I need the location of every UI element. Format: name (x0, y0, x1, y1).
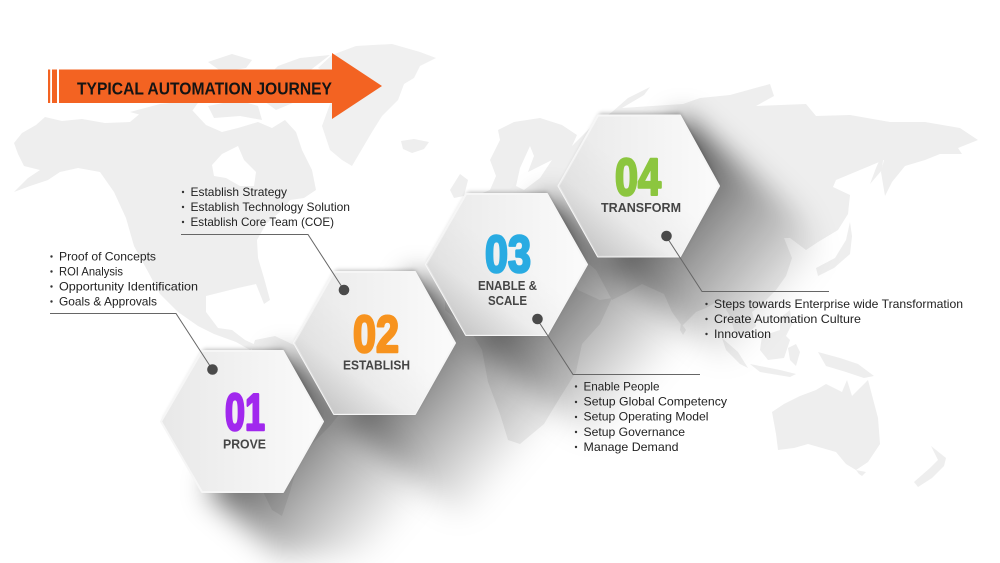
text block: step 03 bullets: Enable People (584, 380, 660, 394)
map: Australia (772, 380, 880, 470)
hexagon 01 top shadow (164, 349, 321, 490)
text block: step 02 bullets: Establish Core Team (COE) (190, 215, 334, 229)
hexagon 03 (426, 194, 587, 335)
map: Hudson Bay cutout (212, 146, 256, 186)
map: South America (240, 336, 352, 516)
text block: step 04 bullets: Create Automation Culture (714, 312, 861, 326)
hexagon 04 top shadow (561, 113, 718, 255)
text block: step 01 bullets (50, 250, 198, 308)
panel: step 03 enable and scale (426, 192, 587, 335)
text block: step 04 bullets: Innovation (714, 327, 771, 341)
text block: step 04 bullets: Steps towards Enterprise wide Transformation (714, 297, 963, 311)
hexagon 02 inner shade (294, 272, 455, 414)
label transform: TRANSFORM (601, 200, 681, 215)
text block: step 04 bullets (705, 297, 963, 341)
callout: step 01 leader line (50, 314, 218, 375)
text block: step 03 bullets (575, 380, 727, 454)
map: Baltic cutout (516, 146, 552, 190)
arrow stripes (48, 70, 57, 103)
hexagon 02 (294, 272, 455, 414)
callout: step 02 leader line (181, 234, 349, 295)
number 04: 04 (615, 149, 661, 207)
shadow: hexagon 02 (340, 272, 575, 514)
text block: step 02 bullets (182, 185, 350, 229)
text block: step 03 bullets: Manage Demand (584, 440, 678, 454)
text block: step 01 bullets: ROI Analysis (59, 264, 123, 278)
map: Greenland (318, 44, 436, 166)
label establish: ESTABLISH (343, 358, 410, 372)
map: North America (14, 108, 316, 350)
callout: step 04 leader line (661, 231, 829, 292)
text block: step 03 bullets: Setup Governance (584, 425, 685, 439)
panel: step 04 transform (558, 113, 719, 256)
hexagon 01 (161, 351, 323, 492)
map: Eurasia (470, 84, 978, 338)
text block: step 01 bullets: Proof of Concepts (59, 250, 156, 264)
map: Tasmania (856, 470, 866, 476)
hexagon long shadows (208, 115, 840, 556)
hexagon 03 top shadow (428, 192, 585, 333)
hexagon 02 top shadow (296, 270, 453, 412)
text block: step 01 bullets: Goals & Approvals (59, 294, 157, 308)
map: Southeast Asia islands (722, 310, 874, 378)
text block: step 02 bullets: Establish Strategy (190, 185, 287, 199)
callout: step 03 leader line (532, 314, 700, 374)
panel: step 01 prove (161, 349, 323, 492)
map: Arctic islands (130, 54, 330, 120)
text block: step 02 bullets: Establish Technology Solution (190, 200, 350, 214)
hexagon 04 (558, 116, 719, 256)
label enable and scale: SCALE (488, 293, 527, 308)
text block: step 03 bullets: Setup Global Competency (584, 394, 727, 408)
hexagon 04 inner shade (558, 116, 719, 256)
map: Iceland (401, 139, 429, 153)
title: TYPICAL AUTOMATION JOURNEY (77, 78, 332, 98)
map: Africa (445, 215, 612, 444)
arrow shape (59, 53, 382, 119)
text block: step 03 bullets: Setup Operating Model (584, 410, 708, 424)
shadow: hexagon 04 (604, 115, 840, 357)
map: Madagascar (548, 364, 566, 404)
label enable and scale: ENABLE & (478, 278, 537, 293)
map: UK and Ireland (450, 174, 468, 198)
hexagon 03 inner shade (426, 194, 587, 335)
map: Japan and Sakhalin (816, 150, 884, 276)
number 02: 02 (353, 306, 399, 364)
number 01: 01 (225, 384, 265, 442)
map: Sri Lanka (680, 323, 686, 335)
number 03: 03 (485, 226, 531, 284)
shadow: hexagon 01 (208, 351, 443, 556)
map: New Zealand (914, 446, 946, 487)
text block: step 01 bullets: Opportunity Identification (59, 280, 198, 294)
shadow: hexagon 03 (472, 194, 707, 435)
label prove: PROVE (223, 436, 266, 452)
title arrow banner (48, 53, 382, 119)
panel: step 02 establish (294, 270, 455, 414)
